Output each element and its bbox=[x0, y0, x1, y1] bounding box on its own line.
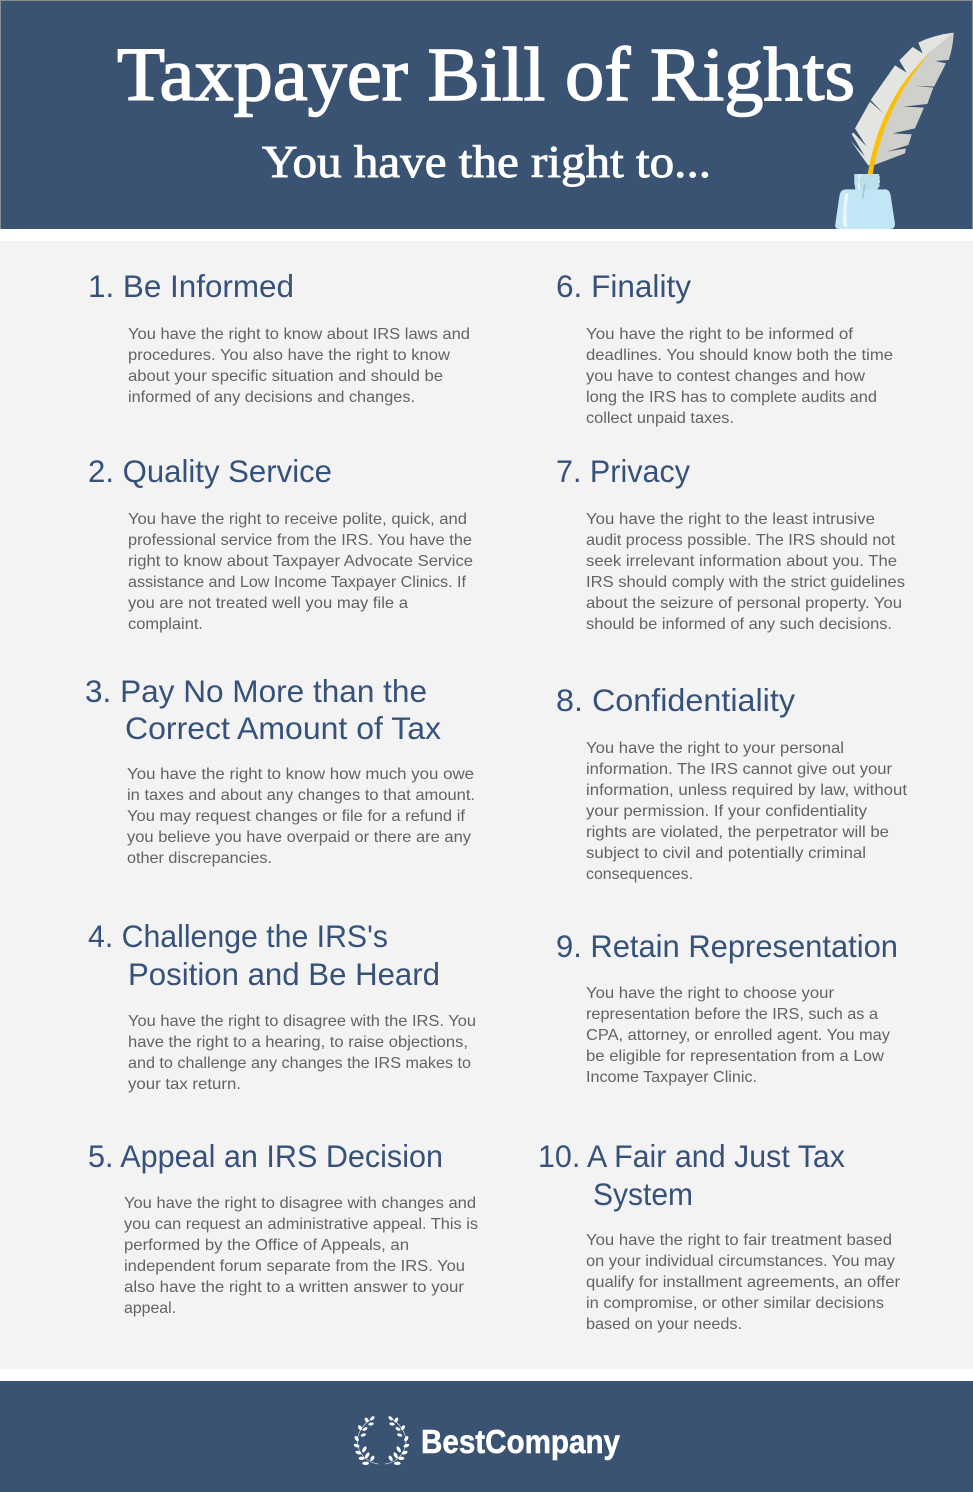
section 6: Finality: long the IRS has to complete audits and bbox=[586, 389, 877, 406]
section 10: A Fair and Just Tax System: in compromise, or other similar decisions bbox=[586, 1295, 884, 1312]
section 3: Pay No More than the Correct Amount of Tax: You may request changes or file for a refund if bbox=[127, 808, 466, 825]
content background bbox=[0, 241, 973, 1369]
section 7: Privacy: audit process possible. The IRS should not bbox=[586, 532, 896, 549]
section 5: Appeal an IRS Decision: appeal. bbox=[124, 1300, 176, 1317]
section 7: Privacy: should be informed of any such decisions. bbox=[586, 616, 892, 633]
section 10: A Fair and Just Tax System: You have the right to fair treatment based bbox=[586, 1232, 892, 1249]
footer band bbox=[0, 1381, 973, 1492]
subtitle: You have the right to... bbox=[262, 136, 711, 187]
section 5: Appeal an IRS Decision: you can request an administrative appeal. This is bbox=[124, 1216, 478, 1233]
section 2: Quality Service: professional service from the IRS. You have the bbox=[128, 532, 472, 549]
section 7: Privacy: You have the right to the least intrusive bbox=[586, 511, 875, 528]
section 2: Quality Service: You have the right to receive polite, quick, and bbox=[128, 511, 467, 528]
section 6: Finality bbox=[556, 268, 893, 427]
section 9: Retain Representation: representation before the IRS, such as a bbox=[586, 1006, 878, 1023]
icon: quill and inkwell bbox=[835, 33, 954, 229]
section 1: Be Informed bbox=[88, 268, 470, 406]
section 7: Privacy: seek irrelevant information about you. The bbox=[586, 553, 897, 570]
section 9: Retain Representation: Income Taxpayer Clinic. bbox=[586, 1069, 757, 1086]
section 2: Quality Service: 2. Quality Service bbox=[88, 453, 332, 489]
section 5: Appeal an IRS Decision: You have the right to disagree with changes and bbox=[124, 1195, 476, 1212]
section 5: Appeal an IRS Decision bbox=[88, 1138, 478, 1317]
section 4: Challenge the IRS's Position and Be Heard: 4. Challenge the IRS's bbox=[88, 918, 388, 954]
section 2: Quality Service bbox=[88, 453, 473, 633]
section 3: Pay No More than the Correct Amount of Tax bbox=[85, 673, 475, 867]
section 8: Confidentiality: consequences. bbox=[586, 866, 693, 883]
section 4: Challenge the IRS's Position and Be Heard: You have the right to disagree with the IRS. You bbox=[128, 1013, 476, 1030]
section 6: Finality: 6. Finality bbox=[556, 268, 691, 304]
logo wordmark: BestCompany bbox=[421, 1423, 621, 1460]
section 9: Retain Representation bbox=[556, 928, 898, 1086]
section 2: Quality Service: you are not treated well you may file a bbox=[128, 595, 408, 612]
section 4: Challenge the IRS's Position and Be Heard: Position and Be Heard bbox=[128, 956, 440, 992]
section 6: Finality: deadlines. You should know both the time bbox=[586, 347, 893, 364]
section 6: Finality: collect unpaid taxes. bbox=[586, 410, 734, 427]
section 10: A Fair and Just Tax System: qualify for installment agreements, an offer bbox=[586, 1274, 901, 1291]
icon: laurel wreath bbox=[353, 1415, 410, 1465]
section 1: Be Informed: 1. Be Informed bbox=[88, 268, 294, 304]
section 9: Retain Representation: You have the right to choose your bbox=[586, 985, 835, 1002]
section 2: Quality Service: complaint. bbox=[128, 616, 203, 633]
section 8: Confidentiality: 8. Confidentiality bbox=[556, 682, 795, 718]
section 1: Be Informed: about your specific situation and should be bbox=[128, 368, 443, 385]
section 5: Appeal an IRS Decision: 5. Appeal an IRS Decision bbox=[88, 1138, 443, 1174]
section 7: Privacy: IRS should comply with the strict guidelines bbox=[586, 574, 905, 591]
section 3: Pay No More than the Correct Amount of Tax: You have the right to know how much you owe bbox=[127, 766, 474, 783]
section 5: Appeal an IRS Decision: performed by the Office of Appeals, an bbox=[124, 1237, 409, 1254]
section 4: Challenge the IRS's Position and Be Heard: have the right to a hearing, to raise objections, bbox=[128, 1034, 468, 1051]
header band bbox=[0, 0, 973, 229]
section 10: A Fair and Just Tax System: on your individual circumstances. You may bbox=[586, 1253, 895, 1270]
section 3: Pay No More than the Correct Amount of Tax: Correct Amount of Tax bbox=[125, 710, 441, 746]
section 2: Quality Service: right to know about Taxpayer Advocate Service bbox=[128, 553, 473, 570]
title: Taxpayer Bill of Rights bbox=[117, 33, 855, 117]
section 1: Be Informed: You have the right to know about IRS laws and bbox=[128, 326, 470, 343]
section 2: Quality Service: assistance and Low Income Taxpayer Clinics. If bbox=[128, 574, 467, 591]
section 10: A Fair and Just Tax System: System bbox=[593, 1176, 693, 1212]
section 8: Confidentiality: information. The IRS cannot give out your bbox=[586, 761, 893, 778]
section 10: A Fair and Just Tax System: 10. A Fair and Just Tax bbox=[538, 1138, 845, 1174]
section 7: Privacy bbox=[556, 453, 905, 633]
section 4: Challenge the IRS's Position and Be Heard: your tax return. bbox=[128, 1076, 241, 1093]
section 3: Pay No More than the Correct Amount of Tax: other discrepancies. bbox=[127, 850, 272, 867]
section 1: Be Informed: procedures. You also have the right to know bbox=[128, 347, 450, 364]
section 8: Confidentiality: information, unless required by law, without bbox=[586, 782, 908, 799]
section 6: Finality: you have to contest changes and how bbox=[586, 368, 865, 385]
section 5: Appeal an IRS Decision: also have the right to a written answer to your bbox=[124, 1279, 465, 1296]
section 6: Finality: You have the right to be informed of bbox=[586, 326, 854, 343]
section 4: Challenge the IRS's Position and Be Heard bbox=[88, 918, 476, 1093]
section 10: A Fair and Just Tax System: based on your needs. bbox=[586, 1316, 742, 1333]
section 8: Confidentiality bbox=[556, 682, 908, 883]
section 4: Challenge the IRS's Position and Be Heard: and to challenge any changes the IRS makes to bbox=[128, 1055, 471, 1072]
section 8: Confidentiality: subject to civil and potentially criminal bbox=[586, 845, 866, 862]
section 9: Retain Representation: be eligible for representation from a Low bbox=[586, 1048, 884, 1065]
section 8: Confidentiality: rights are violated, the perpetrator will be bbox=[586, 824, 889, 841]
section 10: A Fair and Just Tax System bbox=[538, 1138, 901, 1333]
section 9: Retain Representation: CPA, attorney, or enrolled agent. You may bbox=[586, 1027, 890, 1044]
section 8: Confidentiality: You have the right to your personal bbox=[586, 740, 844, 757]
section 7: Privacy: 7. Privacy bbox=[556, 453, 690, 489]
section 8: Confidentiality: your permission. If your confidentiality bbox=[586, 803, 867, 820]
section 7: Privacy: about the seizure of personal property. You bbox=[586, 595, 902, 612]
section 3: Pay No More than the Correct Amount of Tax: you believe you have overpaid or there are any bbox=[127, 829, 471, 846]
section 3: Pay No More than the Correct Amount of Tax: in taxes and about any changes to that amount. bbox=[127, 787, 475, 804]
section 5: Appeal an IRS Decision: independent forum separate from the IRS. You bbox=[124, 1258, 465, 1275]
section 3: Pay No More than the Correct Amount of Tax: 3. Pay No More than the bbox=[85, 673, 427, 709]
section 9: Retain Representation: 9. Retain Representation bbox=[556, 928, 898, 964]
section 1: Be Informed: informed of any decisions and changes. bbox=[128, 389, 415, 406]
